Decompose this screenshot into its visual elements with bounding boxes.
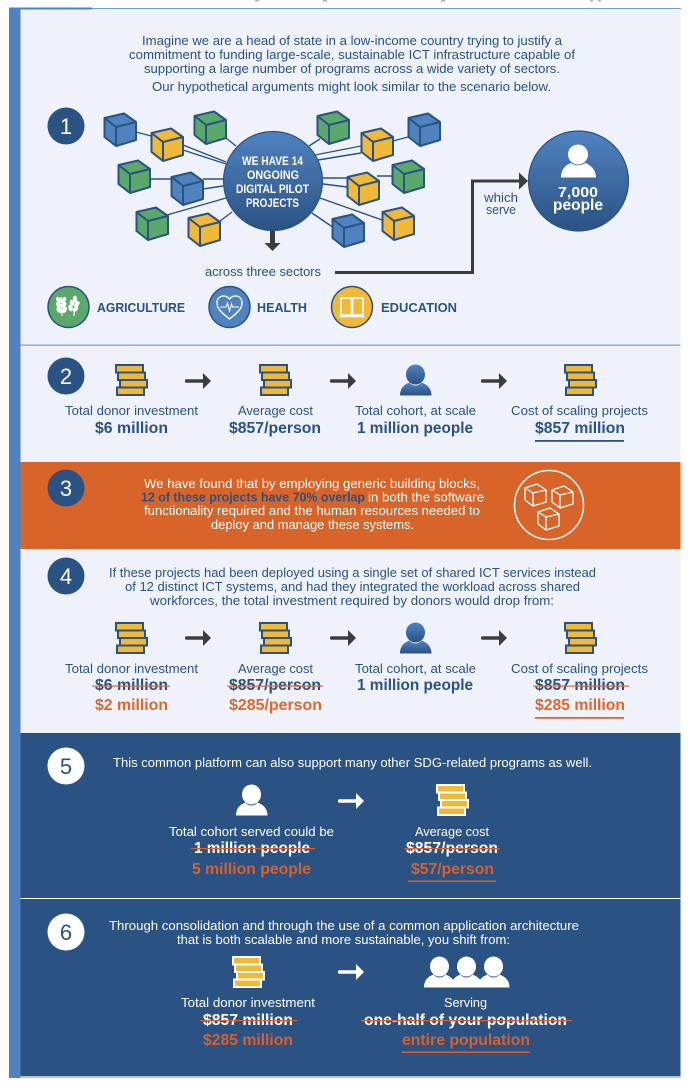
icon: coins: [116, 365, 147, 395]
panel 1: pilot projects: [20, 10, 680, 345]
sector: agriculture: AGRICULTURE: [97, 300, 185, 315]
central circle: 14 pilot projects: ONGOING: [247, 170, 299, 182]
consolidation text: that is both scalable and more sustainable, you shift from:: [177, 932, 510, 947]
consolidation text: Through consolidation and through the use of a common application architecture: [109, 918, 579, 933]
stat: donor investment: [65, 661, 198, 714]
icon: coins: [437, 785, 468, 815]
stat: serving: entire population: [402, 1032, 530, 1049]
which serve: [483, 190, 518, 217]
number badge 4: 4: [60, 564, 72, 589]
stat: donor investment: $857 million: [203, 1012, 293, 1029]
sector: health: [209, 286, 307, 328]
icon: person: [236, 784, 268, 816]
stat: cohort served: Total cohort served could be: [169, 824, 334, 839]
icon: coins: [565, 623, 596, 653]
stat: cost of scaling: [511, 661, 648, 719]
icon: coins: [233, 957, 264, 987]
finding text: We have found that by employing generic building blocks,: [144, 476, 480, 491]
icon: three people: [424, 956, 510, 988]
number badge 5: [48, 748, 84, 784]
stat: donor investment: [181, 995, 315, 1049]
circle: 7,000 people: 7,000: [558, 184, 598, 201]
stat: average cost: $857/person: [406, 840, 498, 857]
arrow: [185, 630, 211, 646]
platform text: This common platform can also support many other SDG-related programs as well.: [113, 755, 592, 770]
stat: average cost: Average cost: [238, 403, 313, 418]
stat: cohort served: 5 million people: [192, 861, 311, 878]
icon: person: [400, 364, 432, 396]
stat: serving: [361, 995, 572, 1053]
clipped header descenders: [255, 0, 601, 2]
stat: cohort served: 1 million people: [194, 840, 310, 857]
stat: cost of scaling: $857 million: [535, 677, 625, 694]
stat: donor investment: Total donor investment: [65, 661, 198, 676]
icon: person: [400, 622, 432, 654]
stat: average cost: Average cost: [415, 824, 489, 839]
arrow: [338, 793, 364, 809]
stat: total cohort: [355, 403, 476, 437]
central circle: 14 pilot projects: PROJECTS: [246, 198, 299, 210]
stat: cost of scaling: Cost of scaling projects: [511, 403, 648, 418]
sector: education: EDUCATION: [381, 300, 457, 315]
arrow: [185, 373, 211, 389]
circle: 7,000 people: [528, 131, 628, 231]
number badge 3: 3: [60, 476, 72, 501]
stat: cost of scaling: [511, 403, 648, 442]
number badge 2: [48, 358, 84, 394]
finding text: functionality required and the human resources needed to: [144, 503, 480, 518]
stat: donor investment: $2 million: [95, 697, 168, 714]
stat: donor investment: Total donor investment: [181, 995, 315, 1010]
stat: serving: one-half of your population: [364, 1012, 567, 1029]
stat: cost of scaling: $857 million: [535, 420, 625, 437]
stat: average cost: [227, 661, 323, 714]
intro text: commitment to funding large-scale, sustainable ICT infrastructure capable of: [129, 47, 575, 62]
central circle: 14 pilot projects: [224, 132, 322, 230]
stat: serving: Serving: [444, 995, 487, 1010]
stat: total cohort: 1 million people: [357, 677, 473, 694]
stat: average cost: Average cost: [238, 661, 313, 676]
stat: donor investment: [65, 403, 198, 437]
number badge 5: 5: [60, 754, 72, 779]
which serve: which: [483, 190, 518, 205]
intro text: Imagine we are a head of state in a low-income country trying to justify a: [142, 33, 563, 48]
explanation text: If these projects had been deployed using a single set of shared ICT services instead: [109, 565, 596, 580]
sector: agriculture: [48, 286, 185, 328]
panel 4: shared services: [20, 549, 680, 733]
finding text: 12 of these projects have 70% overlap: [141, 490, 365, 504]
finding text: in both the software: [368, 490, 484, 504]
stat: donor investment: $6 million: [95, 677, 168, 694]
arrow: [330, 373, 356, 389]
stat: average cost: [404, 824, 500, 882]
stat: average cost: $57/person: [411, 861, 494, 878]
arrow: sectors to people: [335, 172, 528, 272]
stat: donor investment: $285 million: [203, 1032, 293, 1049]
consolidation text: [109, 918, 579, 947]
project cubes: [104, 112, 440, 247]
sector: health: HEALTH: [257, 300, 307, 315]
number badge 2: 2: [60, 364, 72, 389]
stat: donor investment: $6 million: [95, 420, 168, 437]
icon: coins: [565, 365, 596, 395]
arrow: [338, 964, 364, 980]
stat: total cohort: Total cohort, at scale: [355, 661, 476, 676]
stat: cost of scaling: $285 million: [535, 697, 625, 714]
panel 6: consolidation: [20, 899, 680, 1078]
central circle: 14 pilot projects: WE HAVE 14: [242, 156, 304, 168]
finding text: deploy and manage these systems.: [211, 517, 414, 532]
sector: education: [332, 286, 457, 328]
arrow: [481, 373, 507, 389]
stat: average cost: $857/person: [229, 677, 321, 694]
stat: total cohort: Total cohort, at scale: [355, 403, 476, 418]
number badge 1: 1: [60, 114, 72, 139]
stat: total cohort: [355, 661, 476, 694]
panel 3: orange overlap finding: [20, 462, 680, 549]
explanation text: of 12 distinct ICT systems, and had they integrated the workload across shared: [125, 579, 580, 594]
stat: total cohort: 1 million people: [357, 420, 473, 437]
central circle: 14 pilot projects: DIGITAL PILOT: [236, 184, 309, 196]
icon: coins: [116, 623, 147, 653]
across three sectors: across three sectors: [205, 264, 321, 279]
icon: coins: [260, 365, 291, 395]
arrow: [330, 630, 356, 646]
intro text: Our hypothetical arguments might look similar to the scenario below.: [152, 79, 551, 94]
panel 5: common platform: [20, 733, 680, 898]
panel 2: scaling cost: [20, 344, 680, 462]
stat: cohort served: [169, 824, 334, 878]
which serve: serve: [486, 202, 516, 217]
stat: donor investment: Total donor investment: [65, 403, 198, 418]
explanation text: [109, 565, 596, 608]
stat: average cost: $857/person: [229, 420, 321, 437]
finding text: [141, 476, 484, 532]
icon: circled cubes: [514, 470, 584, 540]
intro text: [129, 33, 575, 94]
arrow: [481, 630, 507, 646]
intro text: supporting a large number of programs across a wide variety of sectors.: [144, 61, 560, 76]
number badge 6: [48, 914, 84, 950]
circle: 7,000 people: people: [553, 197, 603, 214]
icon: coins: [260, 623, 291, 653]
explanation text: workforces, the total investment required by donors would drop from:: [149, 593, 554, 608]
stat: average cost: [229, 403, 321, 437]
arrow: down to sectors: [264, 231, 280, 251]
divider: [20, 898, 680, 899]
stat: cost of scaling: Cost of scaling projects: [511, 661, 648, 676]
number badge 6: 6: [60, 920, 72, 945]
connector lines: [136, 132, 408, 228]
number badge 3: [48, 470, 84, 506]
number badge 1: [48, 108, 84, 144]
number badge 4: [48, 558, 84, 594]
stat: average cost: $285/person: [229, 697, 322, 714]
